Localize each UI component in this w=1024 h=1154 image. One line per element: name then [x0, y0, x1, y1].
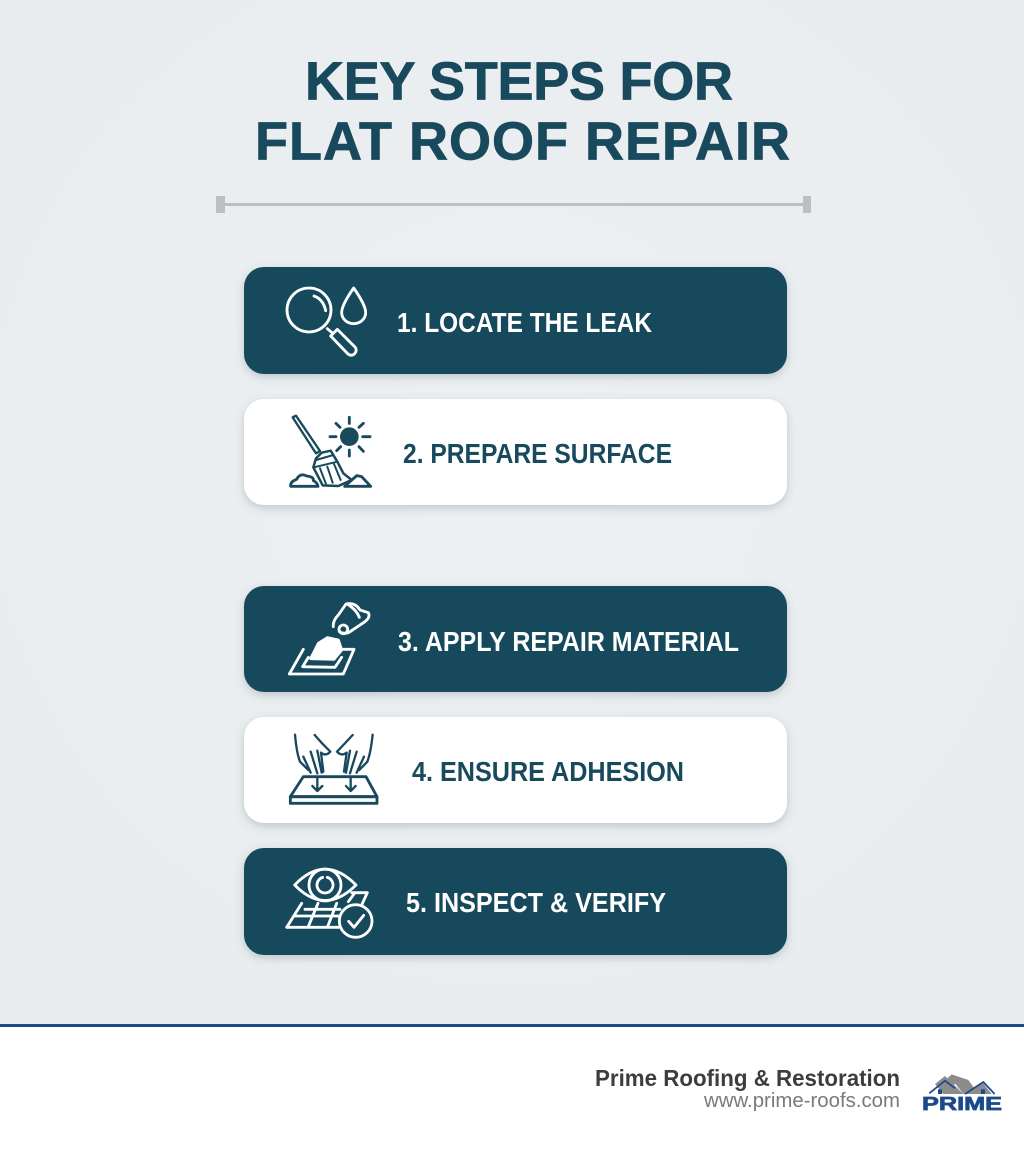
logo: Prime: PRIME [922, 1093, 1002, 1114]
icon: broom, sun and debris [291, 416, 371, 486]
step 1 card: locate the leak [244, 267, 787, 374]
title: KEY STEPS FOR [305, 52, 733, 112]
icon: magnifying glass and water drop [287, 288, 366, 355]
footer band [0, 1024, 1024, 1154]
title [255, 52, 790, 172]
step 4 card: ensure adhesion [244, 717, 787, 823]
step 3 card: apply repair material [244, 586, 787, 692]
title divider [216, 196, 811, 213]
logo: Prime [922, 1074, 1002, 1114]
footer website: www.prime-roofs.com [703, 1089, 900, 1112]
icon: eye over roof tiles with check badge [287, 869, 372, 937]
step 4 label: 4. ENSURE ADHESION [412, 756, 684, 787]
step 3 label: 3. APPLY REPAIR MATERIAL [398, 626, 739, 657]
step 2 card: prepare surface [244, 399, 787, 505]
step 1 label: 1. LOCATE THE LEAK [397, 307, 652, 338]
title: FLAT ROOF REPAIR [255, 112, 790, 172]
step 5 card: inspect and verify [244, 848, 787, 955]
icon: tube applying patch [289, 604, 369, 674]
footer company name: Prime Roofing & Restoration [595, 1065, 900, 1091]
step 5 label: 5. INSPECT & VERIFY [406, 887, 666, 918]
icon: hands pressing membrane [290, 735, 377, 803]
step 2 label: 2. PREPARE SURFACE [403, 438, 672, 469]
